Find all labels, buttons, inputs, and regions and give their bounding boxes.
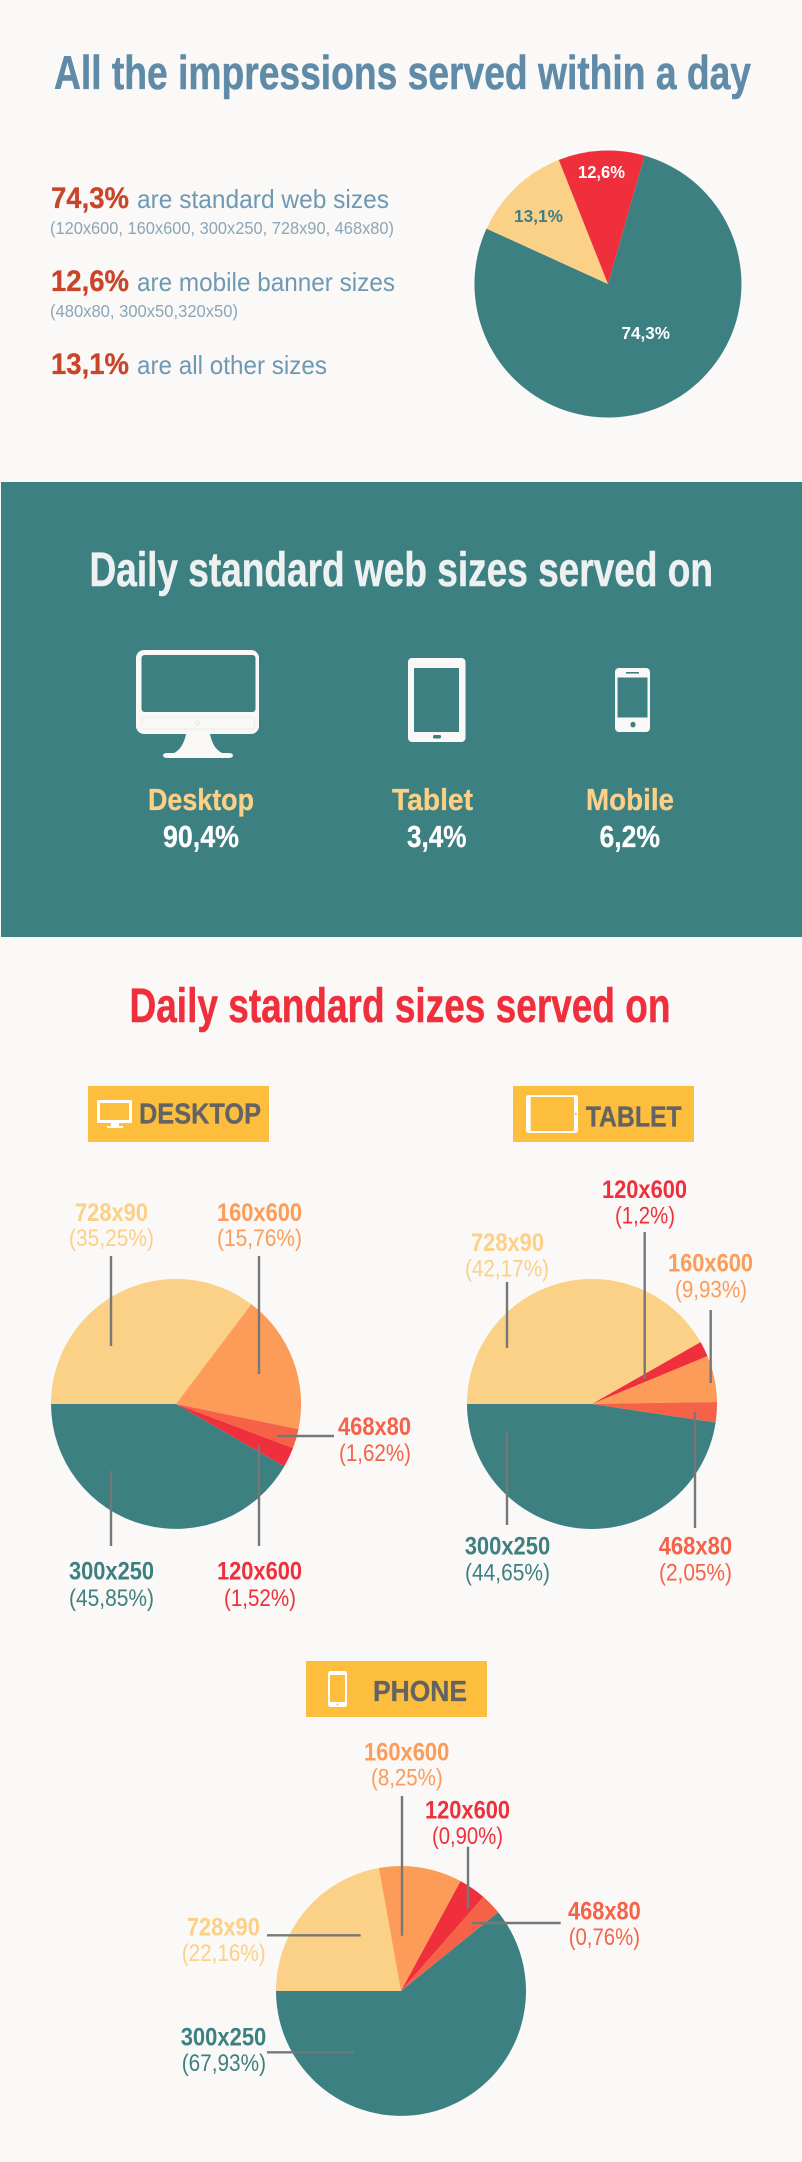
stat: mobile: Mobile: [586, 782, 674, 817]
callout: phone 160x600: [364, 1738, 449, 1936]
panel: daily standard web sizes: [1, 482, 802, 937]
callout: phone 728x90: (22,16%): [182, 1940, 266, 1967]
icon: mobile phone: [615, 668, 650, 732]
pie chart: tablet: [467, 1279, 717, 1529]
callout: phone 300x250: 300x250: [181, 2023, 266, 2051]
callouts: phone: [181, 1738, 641, 2077]
stat: desktop: Desktop: [148, 782, 254, 817]
stat: tablet: 3,4%: [407, 819, 466, 854]
callout: tablet 160x600: (9,93%): [675, 1276, 747, 1304]
callout: tablet 300x250: (44,65%): [465, 1560, 550, 1587]
callout: tablet 120x600: 120x600: [602, 1176, 687, 1204]
stat: all other sizes: 13,1%: [51, 348, 129, 381]
callout: desktop 468x80: 468x80: [338, 1413, 411, 1441]
stat: all other sizes: [51, 348, 327, 381]
callout: phone 300x250: (67,93%): [182, 2050, 266, 2077]
pie chart: desktop: [51, 1279, 301, 1529]
badge: desktop: [88, 1086, 269, 1142]
callout: tablet 160x600: 160x600: [668, 1250, 753, 1278]
badge: phone: PHONE: [373, 1676, 467, 1708]
badge: tablet: TABLET: [586, 1101, 682, 1133]
badge: phone: [306, 1661, 487, 1717]
callout: desktop 120x600: (1,52%): [224, 1585, 296, 1612]
callout: tablet 160x600: [668, 1250, 753, 1383]
icon: desktop outline: [98, 1102, 130, 1128]
callout: tablet 468x80: [659, 1412, 732, 1587]
callout: desktop 120x600: [217, 1445, 302, 1612]
text block: impressions breakdown: [50, 182, 395, 381]
callout: desktop 160x600: [217, 1199, 302, 1374]
callout: desktop 300x250: 300x250: [69, 1558, 154, 1586]
pie chart: all impressions: 12,6%: [578, 162, 625, 182]
callout: desktop 728x90: [69, 1199, 154, 1346]
icon: tablet: [408, 658, 466, 742]
stat: mobile banner sizes: [50, 265, 395, 321]
callout: tablet 728x90: [465, 1229, 549, 1348]
callout: tablet 468x80: (2,05%): [659, 1560, 732, 1587]
stat: mobile: [586, 782, 674, 854]
callout: tablet 120x600: [602, 1176, 687, 1379]
callout: tablet 300x250: 300x250: [465, 1532, 550, 1560]
callouts: tablet: [465, 1176, 753, 1587]
stat: mobile banner sizes: 12,6%: [51, 265, 129, 298]
pie chart: all impressions: 74,3%: [622, 323, 670, 343]
icon: desktop monitor: [136, 650, 259, 758]
callout: phone 160x600: 160x600: [364, 1738, 449, 1766]
callout: desktop 120x600: 120x600: [217, 1558, 302, 1586]
callout: desktop 300x250: (45,85%): [69, 1585, 154, 1612]
callout: desktop 160x600: (15,76%): [217, 1225, 302, 1252]
stat: all other sizes: are all other sizes: [137, 350, 327, 380]
callout: desktop 728x90: (35,25%): [69, 1225, 154, 1252]
badge: desktop: DESKTOP: [139, 1098, 261, 1130]
callout: phone 120x600: [425, 1796, 510, 1909]
callout: phone 728x90: [182, 1913, 361, 1967]
callout: tablet 300x250: [465, 1432, 550, 1587]
callout: desktop 468x80: [277, 1413, 411, 1467]
stat: desktop: [148, 782, 254, 854]
callout: tablet 728x90: (42,17%): [465, 1256, 549, 1282]
callouts: desktop: [69, 1199, 411, 1612]
icon: phone outline: [328, 1671, 347, 1707]
stat: standard web sizes: [50, 182, 394, 238]
stat: mobile banner sizes: (480x80, 300x50,320x50): [50, 301, 238, 321]
stat: mobile: 6,2%: [600, 819, 660, 854]
stat: tablet: [392, 782, 473, 854]
callout: tablet 468x80: 468x80: [659, 1532, 732, 1560]
callout: desktop 300x250: [69, 1471, 154, 1612]
callout: phone 728x90: 728x90: [187, 1913, 260, 1941]
callout: desktop 468x80: (1,62%): [339, 1440, 411, 1467]
callout: phone 468x80: 468x80: [568, 1897, 641, 1925]
callout: phone 468x80: (0,76%): [569, 1924, 640, 1951]
callout: phone 120x600: 120x600: [425, 1796, 510, 1824]
stat: standard web sizes: (120x600, 160x600, 300x250, 728x90, 468x80): [50, 218, 394, 238]
callout: phone 160x600: (8,25%): [371, 1765, 443, 1792]
stat: standard web sizes: 74,3%: [51, 182, 129, 215]
callout: phone 468x80: [472, 1897, 641, 1951]
badge: tablet: [513, 1086, 694, 1142]
icon: tablet outline: [526, 1095, 578, 1133]
pie chart: all impressions: 13,1%: [514, 206, 563, 226]
callout: desktop 728x90: 728x90: [75, 1199, 148, 1227]
stat: desktop: 90,4%: [163, 819, 239, 854]
pie chart: phone: [276, 1866, 526, 2116]
callout: tablet 728x90: 728x90: [471, 1229, 544, 1257]
stat: mobile banner sizes: are mobile banner sizes: [137, 267, 395, 297]
callout: phone 120x600: (0,90%): [432, 1823, 503, 1850]
callout: tablet 120x600: (1,2%): [615, 1202, 675, 1230]
callout: desktop 160x600: 160x600: [217, 1199, 302, 1227]
callout: phone 300x250: [181, 2023, 354, 2077]
stat: tablet: Tablet: [392, 782, 473, 817]
pie chart: all impressions: [474, 151, 741, 418]
stat: standard web sizes: are standard web sizes: [137, 184, 389, 214]
